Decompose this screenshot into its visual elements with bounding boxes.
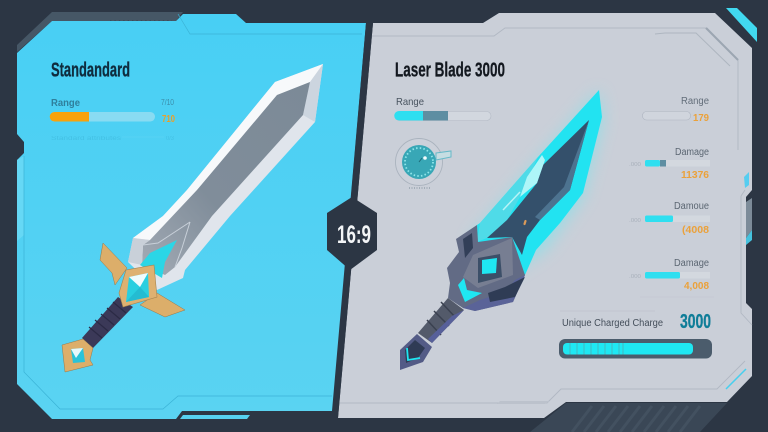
guard bezel <box>463 238 513 288</box>
blade core <box>487 120 589 255</box>
blade highlight <box>520 155 545 197</box>
stat: range <box>50 97 175 125</box>
blade glow <box>470 90 603 280</box>
accent: bottom right line <box>726 369 746 389</box>
panel: standard (left) <box>17 12 366 419</box>
stat: damage 3: Damage <box>674 258 709 269</box>
accent: side strip <box>746 198 752 238</box>
icon: standard sword <box>62 64 323 372</box>
stat: charge <box>559 311 712 358</box>
stat: range: 710 <box>162 113 175 125</box>
handle <box>82 297 133 348</box>
stat: damage 1: .000 <box>629 162 641 168</box>
stat: damage 2: (4008 <box>682 224 709 236</box>
icon: charge dial <box>396 138 451 188</box>
stat: damage 2 <box>629 201 710 236</box>
left panel background <box>17 14 366 419</box>
stat: damage 3: .000 <box>629 274 641 280</box>
right panel background <box>338 13 752 418</box>
stat: damage 1: 11376 <box>681 169 709 181</box>
heading: Laser Blade 3000: Laser Blade 3000 <box>395 60 505 82</box>
stat: range: 7/10 <box>161 98 174 107</box>
guard dark facets <box>488 277 525 302</box>
stat: range (right column): 179 <box>693 112 709 124</box>
stat: damage 2: .000 <box>629 218 641 224</box>
stat: range bar: Range <box>396 96 424 108</box>
blade gem <box>140 240 177 278</box>
faint stat row: Standard attributes <box>51 136 121 142</box>
guard centre <box>119 265 157 307</box>
blade <box>128 64 323 290</box>
guard crescent <box>458 278 482 302</box>
guard <box>447 225 525 311</box>
guard gem <box>482 258 497 274</box>
faint stat row: 0/3 <box>166 136 175 142</box>
badge: 16:9 <box>327 197 377 270</box>
stat: charge: 3000 <box>680 311 711 333</box>
stat: damage 3 <box>629 258 714 297</box>
stat: charge: Unique Charged Charge <box>562 318 663 329</box>
blade fuller <box>142 82 310 275</box>
decorative floor stripes <box>530 403 727 432</box>
faint stat row <box>51 136 175 142</box>
accent: side tab <box>744 172 749 188</box>
guard arms <box>100 243 127 285</box>
stat: damage 1: Damage <box>675 147 709 158</box>
heading: Standandard: Standandard <box>51 60 130 82</box>
guard gem <box>126 273 149 302</box>
stat: damage 3: 4,008 <box>684 280 709 292</box>
badge: 16:9: 16:9 <box>337 221 371 249</box>
blade <box>477 90 602 275</box>
stat: range bar <box>394 96 491 120</box>
panel: laser blade (right) <box>338 8 757 418</box>
accent: top right corner <box>726 8 757 42</box>
stat: range (right column): Range <box>681 96 709 107</box>
pommel gem <box>71 348 85 363</box>
icon: laser sword <box>400 90 603 370</box>
stat: range (right column) <box>642 96 709 124</box>
handle braid <box>418 298 464 343</box>
pommel <box>62 339 93 372</box>
divider band <box>332 23 373 418</box>
top-left frame trim <box>17 12 183 52</box>
stat: damage 1 <box>629 147 710 181</box>
stat: range: Range <box>51 97 80 109</box>
pommel <box>400 334 432 370</box>
stat: damage 2: Damoue <box>674 201 709 212</box>
